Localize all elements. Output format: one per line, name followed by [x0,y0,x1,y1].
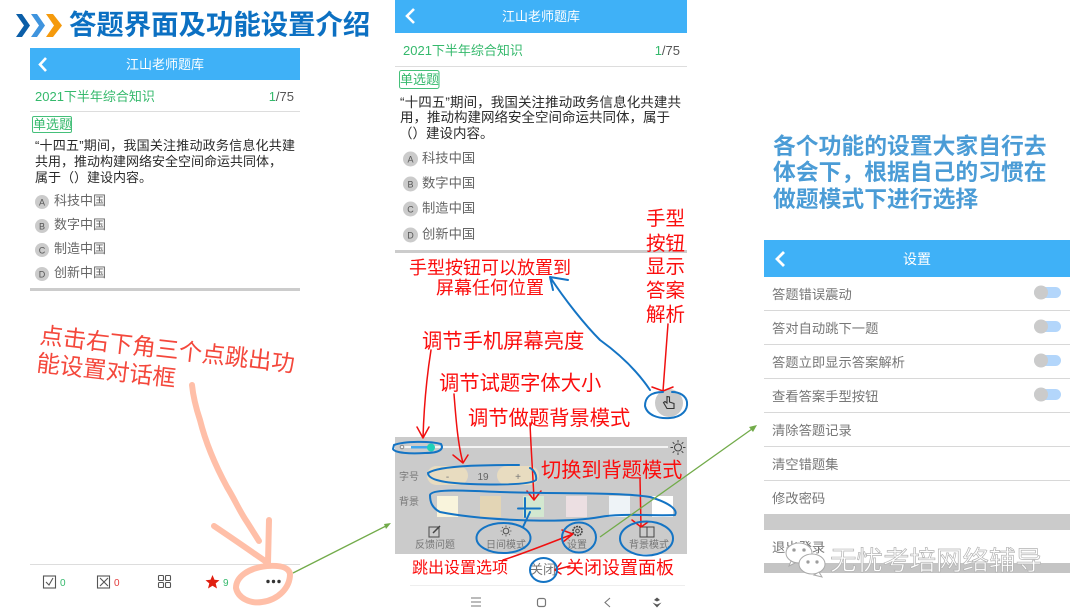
row dividers [764,310,1070,481]
callout: hand button shows answer analysis [646,208,685,326]
question text: （）建设内容。 [399,125,494,141]
text block: explanation: 做题模式下进行选择 [773,186,978,212]
annotation labels: red callouts [409,208,685,578]
settings rows: 清除答题记录 [772,422,852,438]
exam title row: 2021下半年综合知识 [403,43,523,58]
callout: font size: 调节试题字体大小 [439,372,601,395]
question text: 用，推动构建网络安全空间命运共同体，属于 [400,109,670,125]
blue hand-drawn marks [393,277,687,582]
answer options: B [39,222,45,232]
settings rows: 清空错题集 [772,457,838,472]
callout: brightness: 调节手机屏幕亮度 [422,330,584,353]
callout: memorize mode: 切换到背题模式 [541,459,682,482]
question text: 属于（）建设内容。 [35,170,152,185]
question text: 共用，推动构建网络安全空间命运共同体， [35,154,282,169]
question text [35,138,295,185]
answer options: 制造中国 [422,200,475,216]
title text: 答题界面及功能设置介绍 [69,9,370,40]
panel: left phone question screen [30,48,300,589]
answer options: 数字中国 [422,176,475,190]
answer options: C [407,204,414,214]
background swatches: 背景 [399,495,419,508]
header bar [30,48,300,80]
settings rows: 答对自动跳下一题 [772,320,878,336]
font size control: 字号 [399,470,419,483]
header bar [764,240,1070,277]
callout: background mode: 调节做题背景模式 [468,407,630,430]
panel: settings screen [764,240,1070,573]
arrow: green to settings panel [293,523,391,573]
header bar: 江山老师题库 [502,9,580,24]
arrow: salmon hand-drawn pointer [192,385,290,602]
close button: 关闭 [530,562,556,577]
phone navigation bar [410,585,685,608]
question text: “十四五”期间，我国关注推动政务信息化共建 [35,138,295,153]
icon: triple chevrons [16,14,62,37]
bottom toolbar: 0 [60,578,66,589]
tool: settings [567,526,587,551]
question type tag: 单选题 [33,117,72,132]
bottom toolbar: 0 [114,578,120,589]
answer options: 创新中国 [422,226,475,242]
callout: hand button shows answer analysis: 手型 [646,208,685,230]
arrow: green to settings screen [600,425,757,537]
bottom toolbar: 9 [223,578,229,589]
annotation: open function settings dialog [35,322,296,405]
brightness slider [400,440,686,455]
tool: background mode: 背景模式 [629,538,669,551]
background swatches [399,495,673,517]
callout: hand button position: 手型按钮可以放置到 [409,258,571,278]
text block: explanation: 体会下，根据自己的习惯在 [773,159,1047,185]
header bar: 江山老师题库 [126,57,204,72]
settings rows: 退出登录 [772,540,825,555]
answer options: 科技中国 [54,193,106,208]
panel: brightness, font and background settings [395,437,687,554]
answer options: B [407,180,414,190]
red pointer arrows [417,324,673,574]
callout: hand button shows answer analysis: 按钮 [646,233,685,255]
text block: explanation [773,133,1047,212]
answer options: 制造中国 [54,241,106,256]
answer options [403,150,475,242]
font size control [399,466,539,485]
annotation: open function settings dialog: 能设置对话框 [35,350,177,392]
title [16,9,370,40]
toggles [1034,286,1061,402]
watermark text: 无忧考培网络辅导 [830,546,1042,576]
answer options: C [39,246,46,256]
answer options: A [39,198,45,208]
settings rows: 答题错误震动 [772,286,852,302]
answer options: A [407,154,414,164]
header bar [395,0,687,33]
settings rows: 查看答案手型按钮 [772,388,878,404]
answer options: D [39,270,46,280]
callout: close settings panel: 关闭设置面板 [566,558,674,578]
tool: background mode [629,527,669,551]
font size control: - [446,472,449,483]
exam title row: 1/75 [655,43,680,58]
font size control: 19 [477,472,489,483]
callout: hand button shows answer analysis: 答案 [646,280,685,302]
question type tag: 单选题 [400,72,439,87]
font size control: + [515,472,521,483]
settings rows: 答题立即显示答案解析 [772,354,905,370]
answer options: 创新中国 [54,265,106,280]
header bar: 设置 [903,251,931,267]
callout: hand button position: 屏幕任何位置 [436,278,544,298]
answer options: 数字中国 [54,217,106,232]
exam title row: 2021下半年综合知识 [35,89,155,104]
question text [399,94,681,141]
icon: WeChat logo [786,543,825,577]
watermark [786,543,1042,577]
callout: hand button shows answer analysis: 显示 [646,256,685,278]
settings rows: 修改密码 [772,490,825,506]
exam title row [30,89,300,112]
answer options [35,193,106,281]
tool: settings: 设置 [567,539,587,551]
exam title row: 1/75 [269,89,294,104]
exam title row [395,43,687,67]
callout: hand button shows answer analysis: 解析 [646,304,685,326]
tool: feedback [415,526,455,551]
answer options: D [407,230,414,240]
text block: explanation: 各个功能的设置大家自行去 [773,133,1047,159]
tool: day mode: 日间模式 [486,538,526,551]
answer options: 科技中国 [422,150,475,166]
icon: hand button [655,389,683,417]
callout: hand button position [409,258,571,298]
question text: “十四五”期间，我国关注推动政务信息化共建共 [400,94,681,110]
panel: middle phone question screen [395,0,687,417]
tool: feedback: 反馈问题 [415,538,455,551]
bottom toolbar [44,575,281,589]
annotation: open function settings dialog: 点击右下角三个点跳出功 [39,322,296,377]
tool: day mode [486,526,526,551]
settings rows [772,286,905,555]
callout: jump to settings: 跳出设置选项 [412,559,508,577]
